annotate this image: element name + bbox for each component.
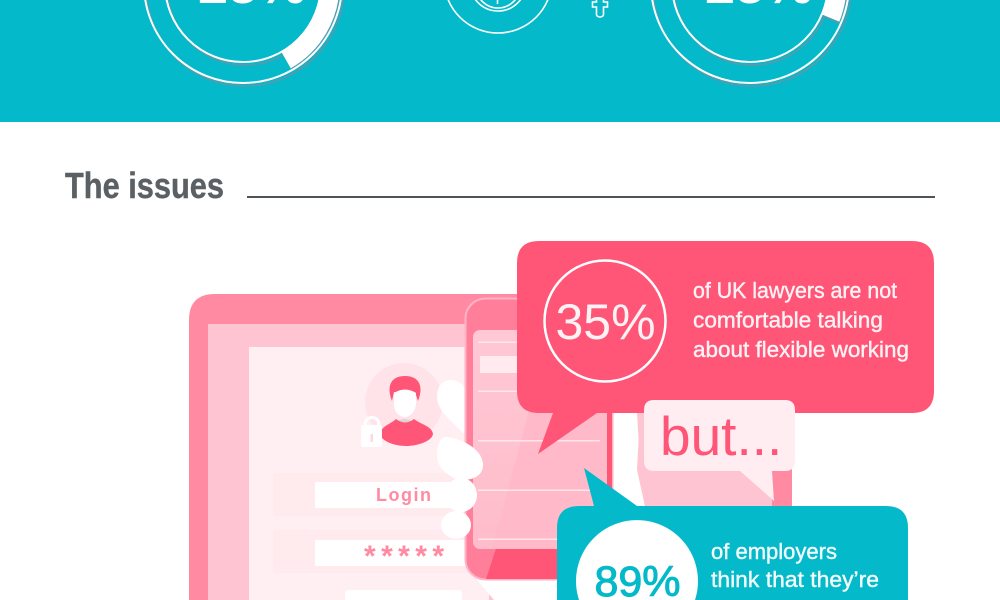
callout text: comfortable talking: [693, 308, 883, 332]
callout: but...: but...: [660, 405, 782, 467]
phone: [466, 298, 612, 580]
submit button: [345, 590, 462, 600]
callout: 35% of UK lawyers: [517, 241, 934, 454]
hand back finger behind phone: [437, 380, 470, 440]
login panel: [249, 347, 489, 600]
callout text: of employers: [711, 539, 837, 564]
laptop lid lower right under "but": [637, 413, 772, 520]
illustration: laptop login screen with phone: [189, 294, 792, 600]
callout: 89% of employers: [557, 468, 908, 600]
chart: right ring gauge: [651, 0, 851, 86]
laptop frame: [189, 294, 792, 600]
laptop screen: [208, 324, 772, 600]
heading rule: [247, 196, 935, 198]
icon: target circles: [444, 0, 552, 33]
callout text: of UK lawyers are not: [693, 278, 897, 303]
callout: but...: [644, 400, 795, 501]
stat circle: 35%: 35%: [555, 294, 656, 350]
stat circle: 89%: [576, 520, 698, 600]
password field: [273, 530, 473, 573]
icon: padlock: [361, 418, 382, 447]
login field: Login: [376, 485, 431, 505]
stat circle: 35%: [544, 260, 666, 382]
callout text: think that they’re: [711, 567, 879, 592]
panel: teal statistics band: [0, 0, 1000, 122]
callout text: about flexible working: [693, 337, 909, 362]
white hand below phone: [477, 575, 560, 600]
avatar: [365, 363, 443, 446]
white gap behind phone: [613, 413, 645, 600]
hand fingers: [437, 437, 483, 539]
chart: left ring gauge: [144, 0, 344, 86]
heading: The issues: The issues: [65, 165, 224, 206]
password field: *****: [364, 540, 444, 573]
icon: plus sign outline: [592, 0, 608, 17]
login field: [273, 473, 473, 516]
